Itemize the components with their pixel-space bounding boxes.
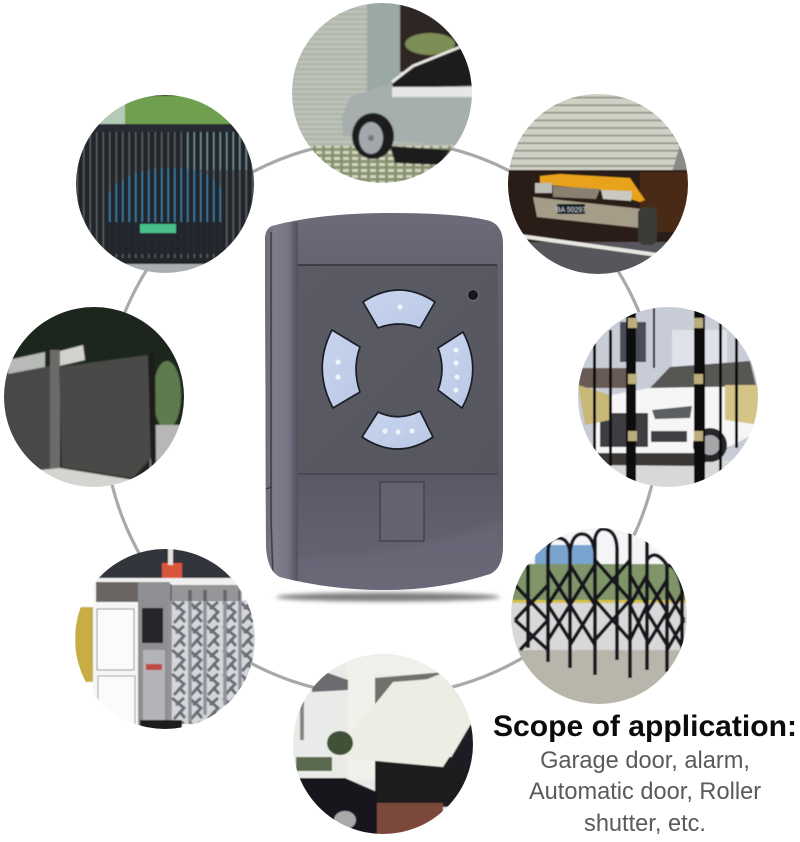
caption: scope of application bbox=[493, 710, 797, 837]
photo: silver folding gate with control box bbox=[75, 549, 255, 729]
licence plate bbox=[556, 204, 586, 214]
remote body bbox=[260, 210, 510, 600]
button: right bbox=[438, 332, 473, 408]
caption heading: Scope of application: bbox=[493, 710, 797, 743]
caption body: Automatic door, Roller bbox=[529, 779, 761, 805]
product: remote control bbox=[260, 210, 510, 602]
button: left bbox=[322, 330, 360, 408]
photo: orange car under roller shutter bbox=[508, 94, 688, 274]
label recess bbox=[380, 482, 424, 541]
caption body: shutter, etc. bbox=[584, 811, 706, 837]
photo: car behind vertical bar gate bbox=[76, 95, 254, 273]
caption body: Garage door, alarm, bbox=[540, 748, 750, 774]
photo: dark sliding gate with trees bbox=[4, 307, 184, 487]
button: top bbox=[363, 290, 435, 328]
remote shadow bbox=[276, 592, 500, 602]
photo: garage with up-and-over door bbox=[293, 654, 473, 834]
photo: black folding gate bbox=[511, 528, 687, 704]
connector ring linking the photos bbox=[104, 140, 660, 696]
button: bottom bbox=[362, 411, 433, 449]
indicator LED bbox=[468, 290, 478, 300]
photo: white SUV behind sliding gate bbox=[578, 307, 758, 487]
licence plate: BA 50297 bbox=[556, 207, 586, 214]
caption body bbox=[529, 748, 761, 837]
photo: silver car at garage door bbox=[292, 3, 472, 183]
inset button panel bbox=[298, 265, 498, 474]
